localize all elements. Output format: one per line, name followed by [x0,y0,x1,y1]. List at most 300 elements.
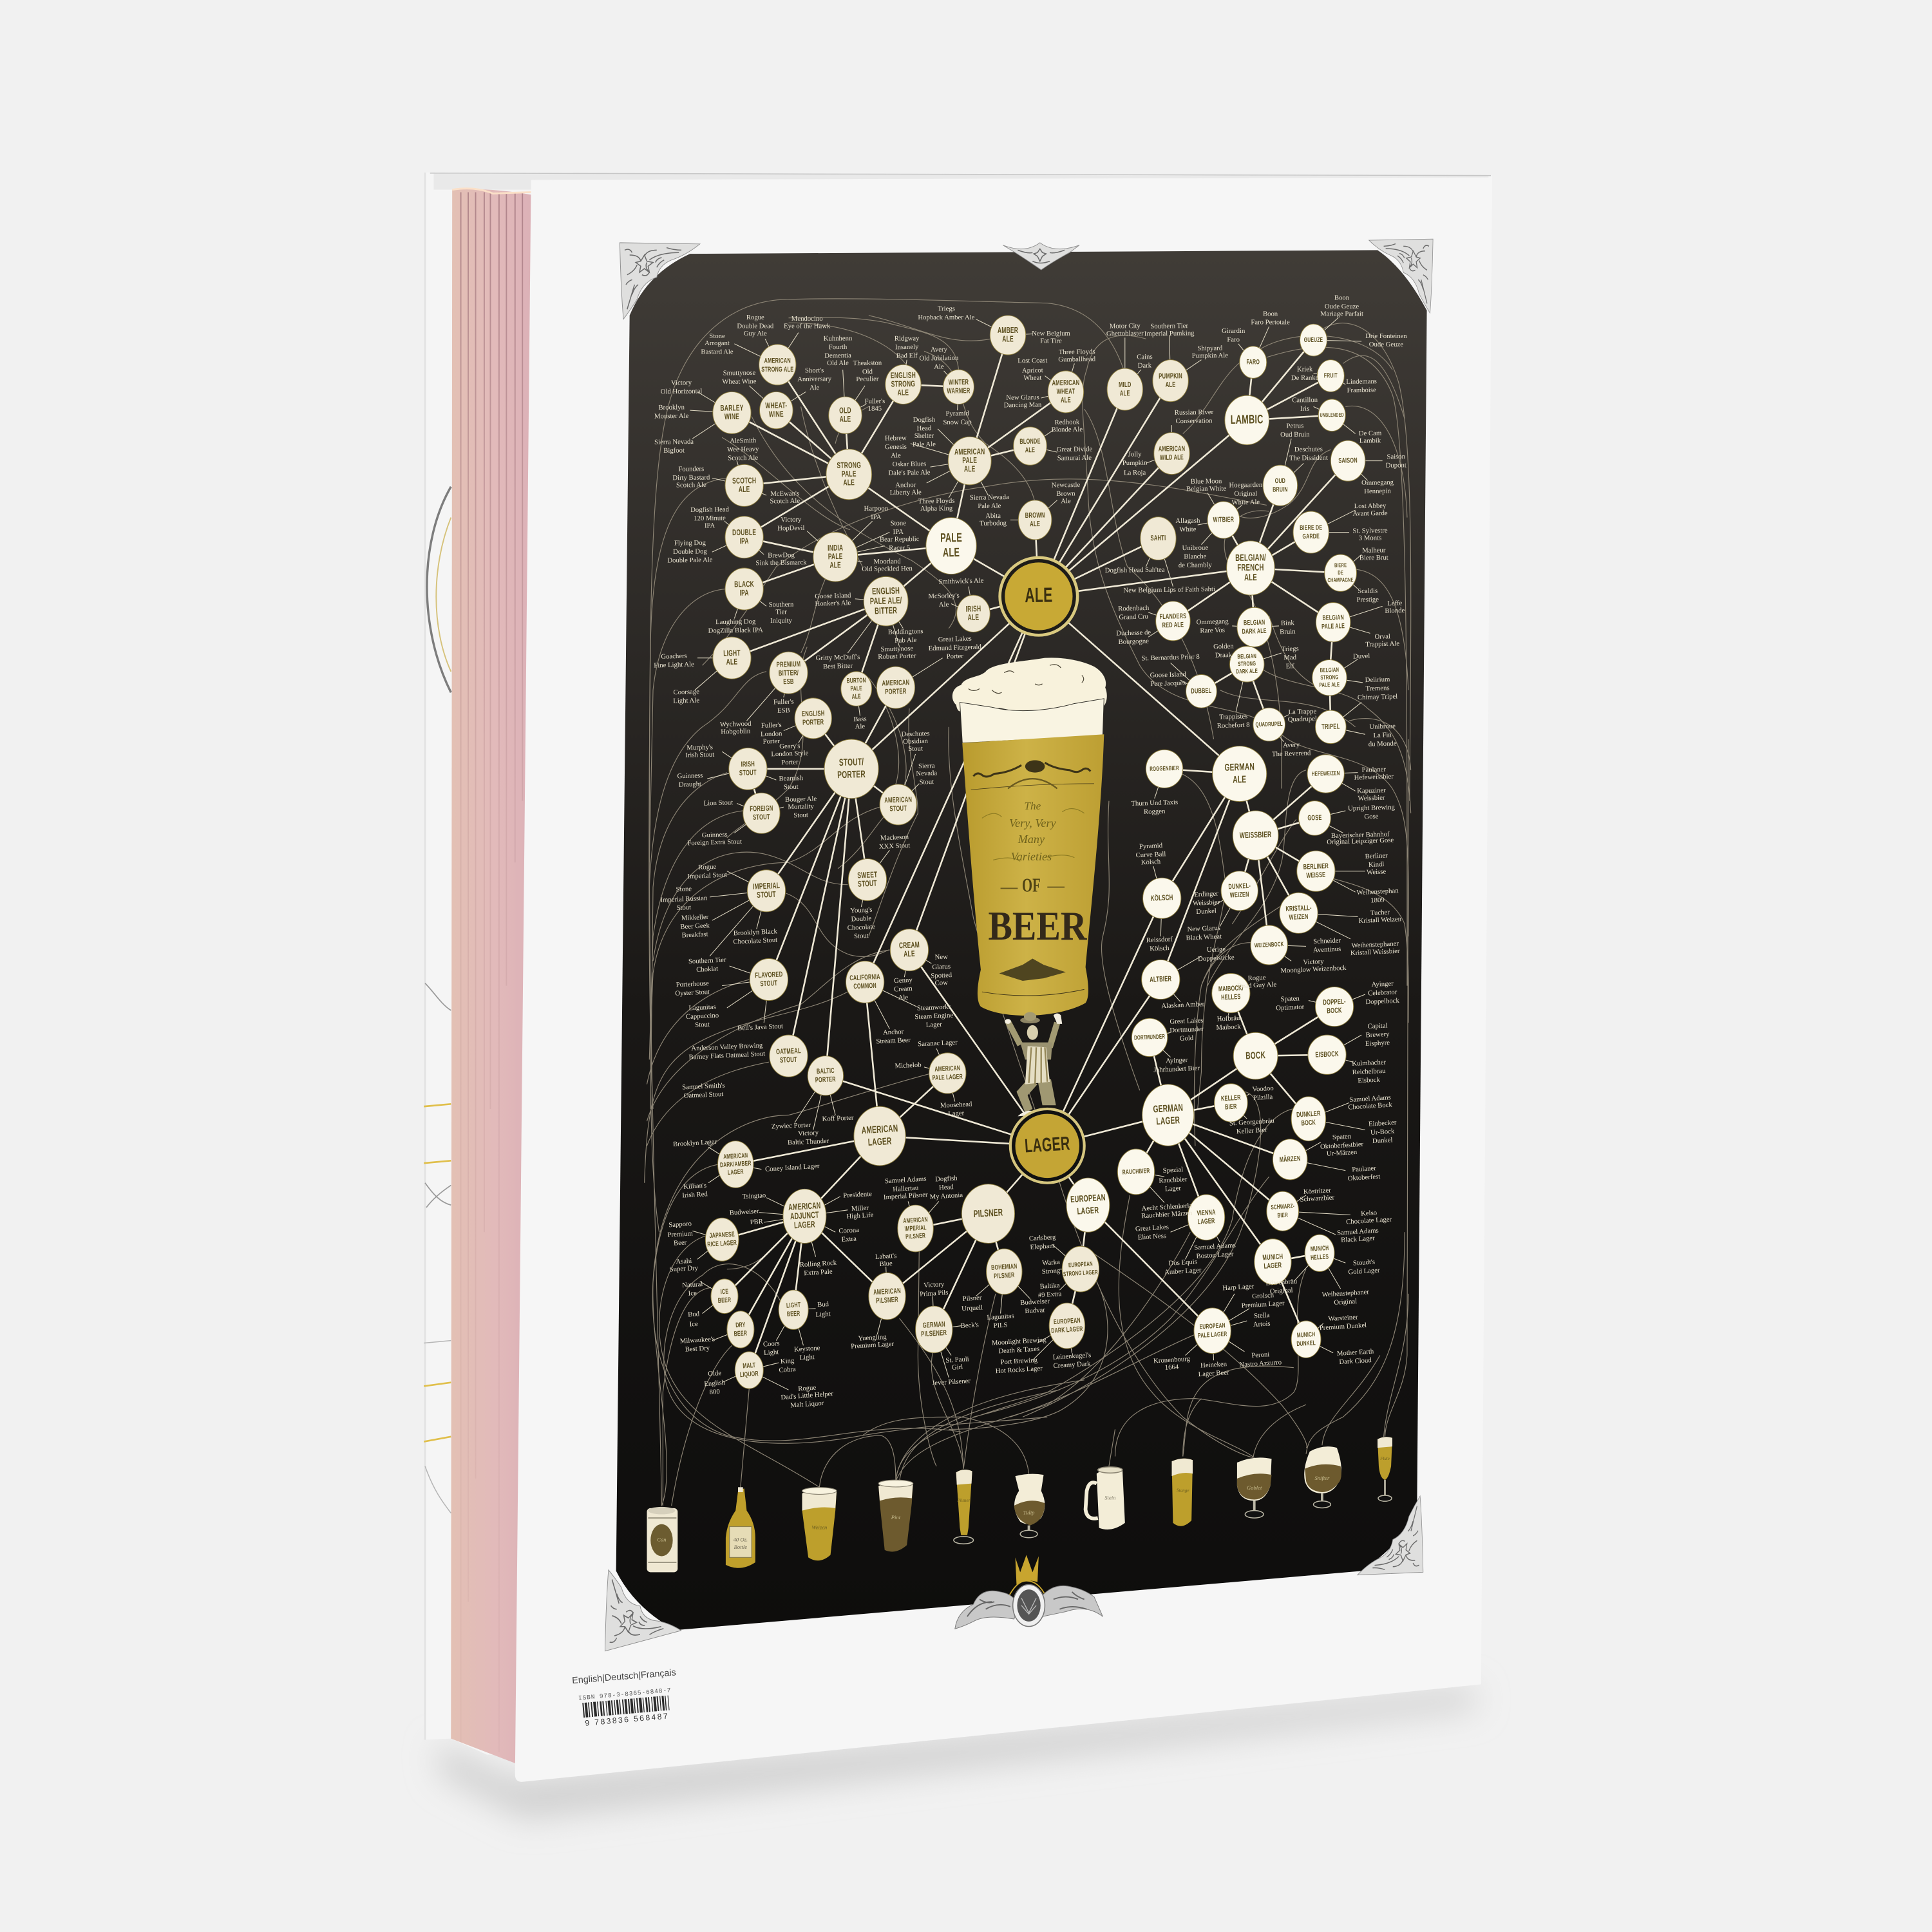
style: Dortmunder [1132,1016,1204,1074]
style: Hefeweizen [1307,755,1394,802]
style: India Pale Ale: Bear Republic [880,535,920,544]
style: Malt Liquor: LIQUOR [739,1370,759,1379]
glass: pilsner [954,1470,973,1544]
style: Cream Ale: Cream [894,985,913,993]
style: Scotch Ale: Founders [678,465,704,473]
style: Vienna Lager: Boston Lager [1196,1250,1234,1260]
style: European Dark Lager: Moonlight Brewing [992,1336,1047,1347]
style: Oatmeal Stout: OATMEAL [776,1047,801,1056]
style: Pale Ale: ALE [943,546,960,560]
style: Cream Ale: ALE [904,949,915,959]
style: Quadrupel: Quadrupel [1288,715,1317,723]
glass: can [647,1507,677,1572]
style: India Pale Ale: ALE [829,561,841,570]
style: Scotch Ale: Wee Heavy [727,445,759,453]
style: Dunkelweizen: Weissbier [1193,898,1220,907]
style: American Dark/Amber Lager: Irish Red [682,1190,708,1200]
style: Sweet Stout: XXX Stout [879,842,911,851]
glass: goblet: Goblet [1247,1484,1262,1491]
style: Flanders Red Ale: Grand Cru [1119,612,1149,621]
style: European Strong Lager: STRONG LAGER [1063,1269,1098,1278]
style: Witbier: Blanche [1184,553,1207,560]
style: Eisbock: Eisbock [1358,1076,1381,1084]
style: American Wheat Ale: Three Floyds [1059,348,1095,356]
style: Amber Ale: ALE [1002,335,1014,344]
style: Dortmunder: Jahrhundert Bier [1153,1065,1200,1074]
slipcase [424,173,1492,1756]
style: Dunkler Bock: Ur-Bock [1370,1128,1395,1137]
style: Baltic Porter: Koff Porter [822,1114,854,1123]
style: Bohemian Pilsner: Lagunitas [987,1312,1014,1321]
style: India Pale Ale: Racer 5 [889,544,910,552]
style: Malt Liquor: Olde [708,1369,722,1378]
style: English Pale Ale / Bitter: Robust Porter [878,652,916,661]
style: Keller Bier: Keller Bier [1236,1126,1268,1135]
poster panel [616,250,1427,1630]
style: Flanders Red Ale: Duchesse de [1116,629,1151,638]
style: American Strong Ale: Double Dead [737,322,774,330]
style: Black IPA: IPA [739,589,749,598]
style: European Strong Lager: Strong [1041,1267,1061,1276]
style: Dry Beer: DRY [735,1321,746,1329]
style: Ice Beer: Ice [689,1320,698,1329]
title: The Very, Very Many Varieties of Beer [988,800,1088,949]
style: Dortmunder: Great Lakes [1170,1016,1204,1026]
style: Saison: Saison [1387,453,1406,460]
style: Munich Dunkel [1291,1313,1374,1366]
glass: stange [1172,1459,1193,1526]
style: Schwarzbier: SCHWARZ- [1271,1202,1294,1211]
style: Scotch Ale: Scotch Ale [676,481,706,489]
style: Maibock / Helles: Maibock [1216,1023,1241,1032]
style: Bohemian Pilsner: Pilsner [962,1294,982,1303]
style: Belgian Pale Ale: Trappist Ale [1365,639,1400,649]
style: Flavored Stout: Stout [695,1021,710,1029]
style: Sahti: SAHTI [1150,535,1166,543]
style: Flavored Stout: Lagunitas [688,1003,716,1012]
style: Witbier: Original [1234,489,1257,498]
beer body [962,734,1104,1016]
style: Belgian / French Ale: ALE [1244,572,1257,583]
style: American Imperial Pilsner: Imperial Pilsner [884,1191,928,1201]
style: European Pale Lager: EUROPEAN [1199,1321,1226,1331]
glass: flute [1378,1437,1392,1501]
style: Flavored Stout [675,956,788,1032]
style: Winter Warmer: Old Jubilation [919,354,959,363]
style: Bohemian Pilsner: Budvar [1025,1306,1046,1315]
style: American Strong Ale [701,314,831,385]
style: Berliner Weisse: 1809 [1370,896,1385,905]
style: Schwarzbier: Samuel Adams [1337,1227,1379,1237]
style: Oud Bruin: Oud Bruin [1280,431,1310,439]
style: German Lager: LAGER [1156,1114,1180,1127]
style: Rauchbier: Rauchbier [1159,1175,1188,1185]
style: English Strong Ale: Bad Elf [896,352,918,360]
style: American Wild Ale: Jolly [1128,450,1142,459]
style: Oatmeal Stout: STOUT [780,1056,797,1065]
style: Vienna Lager: Samuel Adams [1194,1242,1236,1252]
style: Tripel: Chimay Tripel [1358,692,1397,701]
style: Unblended [1292,396,1382,445]
style: Belgian Strong Pale Ale: STRONG [1320,674,1339,681]
glass: flute: Flute [1379,1457,1390,1461]
style: California Common: COMMON [853,981,876,991]
style: European Strong Lager: #9 Extra [1037,1290,1062,1299]
style: Black IPA: Iniquity [770,616,793,625]
style: Oud Bruin: The Dissident [1289,454,1328,462]
style: Belgian Dark Ale [1197,607,1296,647]
style: Keller Bier [1215,1084,1275,1135]
style: Weizenbock: Schneider [1313,936,1341,945]
style: Rauchbier: Aecht Schlenkerla [1141,1202,1193,1213]
style: Tripel: La Fin [1373,731,1392,739]
style: Foreign Stout: Stout [793,811,808,819]
style: Saison: Hennepin [1364,488,1392,495]
style: Amber Ale: Triegs [938,305,955,313]
style: Gueuze: Oude Geuze [1325,303,1359,310]
style: Malt Liquor: Rogue [798,1384,817,1393]
style: Dunkelweizen: WEIZEN [1230,891,1249,900]
style: Berliner Weisse: Berliner [1365,851,1388,860]
style: Premium Bitter / ESB: ESB [777,706,790,715]
style: Sweet Stout: Stout [854,932,869,940]
style: Imperial Stout: STOUT [757,890,776,900]
style: Berliner Weisse [1297,851,1399,905]
style: American Stout [880,730,938,825]
style: English Porter: Porter [781,758,799,766]
style: Belgian Strong Dark Ale: Triegs [1282,645,1299,653]
style: Kristallweizen: Kristall Weizen [1358,915,1402,925]
style: Sweet Stout: Double [851,914,872,923]
style: American Dark/Amber Lager: LAGER [728,1168,744,1176]
style: Rauchbier: RAUCHBIER [1122,1167,1150,1176]
style: English Porter: Fuller's [761,721,782,730]
style: Sweet Stout: SWEET [857,870,878,880]
style: Bohemian Pilsner: BOHEMIAN [991,1262,1018,1271]
style: Munich Lager [1255,1239,1291,1285]
style: Black IPA [708,568,794,635]
style: German Ale [1213,746,1267,802]
style: Doppelbock: Spaten [1280,994,1300,1003]
style: Strong Pale Ale: STRONG [837,461,861,470]
style: Munich Helles: Stoudt's [1353,1258,1375,1267]
barcode [578,1687,674,1728]
style: American Pilsner: AMERICAN [873,1287,901,1297]
style: English Strong Ale: ENGLISH [891,371,916,381]
style: Scotch Ale: ALE [739,485,750,495]
style: Sahti: New Belgium Lips of Faith Sahti [1123,585,1215,594]
style: Dry Beer [679,1311,754,1354]
style: Burton Pale Ale [841,672,872,731]
style: Dortmunder: Ayinger [1166,1056,1188,1065]
style: Biere de Garde: Avant Garde [1352,509,1388,518]
style: Munich Lager: LAGER [1264,1262,1282,1271]
style: Biere de Champagne: Biere Brut [1359,554,1388,562]
style: American Wheat Ale: WHEAT [1057,388,1075,396]
style: India Pale Ale: Moorland [873,558,901,565]
style: India Pale Ale: Harpoon [864,504,889,513]
style: Fruit: Kriek [1297,365,1313,374]
style: Dortmunder: DORTMUNDER [1134,1033,1165,1041]
style: Faro [1222,310,1290,378]
style: Scotch Ale: AleSmith [730,437,757,445]
style: Baltic Porter: BALTIC [817,1066,835,1076]
style: European Pale Lager: Harp Lager [1222,1282,1255,1292]
slipcase see-through artwork [424,487,451,1513]
style: Double IPA: Double Pale Ale [667,556,713,564]
style: Sweet Stout [847,833,911,940]
style: Double IPA: IPA [739,537,749,546]
style: American Dark/Amber Lager [673,1138,820,1200]
style: English Pale Ale / Bitter: Smuttynose [880,645,914,653]
style: Flavored Stout: Bell's Java Stout [737,1023,783,1032]
style: American Stout: STOUT [889,804,907,813]
style: American Wheat Ale: AMERICAN [1052,379,1079,388]
style: Witbier: Hoegaarden [1229,481,1263,489]
style: Kristallweizen: Kristall Weissbier [1350,947,1400,957]
style: Belgian Strong Dark Ale: DARK ALE [1236,668,1258,675]
style: Saison: Ommegang [1361,478,1394,487]
style: Biere de Garde: 3 Monts [1359,534,1381,542]
style: Black IPA: BLACK [734,580,754,589]
style: Old Ale [824,334,885,433]
style: Biere de Champagne: Malheur [1362,546,1386,554]
style: Brown Ale: Abita [985,512,1001,520]
style: Old Ale: Theakston [853,359,882,367]
style: American Pilsner: Labatt's [875,1252,897,1261]
style: Quadrupel: The Reverend [1272,749,1311,758]
style: Japanese Rice Lager: Beer [674,1238,687,1247]
glass: goblet [1237,1457,1271,1518]
style: Pale Ale [926,518,976,574]
style: Imperial Stout: Rogue [698,863,717,871]
style: India Pale Ale: IPA [871,513,882,521]
style: American Adjunct Lager: ADJUNCT [790,1210,819,1222]
style: American Porter: PORTER [885,687,907,696]
style: American Strong Ale: Arrogant [705,339,730,347]
style: American Wheat Ale [1004,348,1096,413]
style: English Pale Ale / Bitter: Gritty McDuff's [816,653,860,662]
bartender holding the glass [1005,1012,1062,1116]
ornament: bottom-left corner [605,1551,681,1651]
style: Amber Ale [918,305,1071,355]
style: Munich Lager: MUNICH [1262,1253,1283,1262]
style: Mild Ale: MILD [1119,381,1132,390]
style: Dry Beer: Milwaukee's [679,1335,715,1345]
style: Irish Ale: ALE [967,613,979,623]
style: Biere de Garde: St. Sylvestre [1352,527,1388,535]
style: German Pilsner: PILSENER [921,1329,947,1339]
style: Pumpkin Ale: Imperial Pumking [1144,329,1195,337]
style: Oatmeal Stout: Oatmeal Stout [683,1090,724,1100]
style: Premium Bitter / ESB: Hobgoblin [721,727,751,736]
style: Strong Pale Ale [826,449,872,500]
style: American Stout: Stout [908,744,923,753]
style: Belgian Strong Pale Ale: BELGIAN [1320,667,1339,674]
style: Burton Pale Ale: Bass [853,715,867,723]
style: Wheat-Wine: Anniversary [797,375,832,383]
style: Imperial Stout [660,863,786,956]
style: German Lager [1142,1084,1194,1146]
style: California Common: Stream Beer [876,1036,911,1045]
style: Old Ale: Peculier [856,375,879,383]
style: Wheat-Wine: Ale [810,384,820,392]
glass: tulip: Tulip [1023,1509,1035,1515]
style: Märzen: Oktoberfest [1347,1173,1381,1182]
style: Brown Ale: ALE [1030,520,1040,529]
style: Pumpkin Ale [1144,322,1228,402]
style: Oud Bruin: Petrus [1286,422,1303,430]
style: Biere de Garde: BIERE DE [1300,524,1322,531]
style: Doppelbock [1276,980,1400,1027]
style: Belgian Pale Ale: Orval [1374,632,1390,641]
style: Scotch Ale: Scotch Ale [770,497,800,505]
style: Kristallweizen [1280,893,1402,957]
style: Premium Bitter / ESB: Wychwood [720,720,752,728]
style: California Common: Lager [926,1021,942,1029]
style: Bohemian Pilsner: PILSNER [994,1271,1015,1280]
style: Japanese Rice Lager: Asahi [676,1257,692,1265]
style: Belgian Dark Ale: Bruin [1280,628,1296,636]
style: American Stout: Nevada [916,769,938,777]
style: Pumpkin Ale: Southern Tier [1150,322,1188,330]
style: American Wheat Ale: Gumballhead [1058,355,1096,364]
style: American Pilsner: Blue [879,1260,893,1268]
style: American Pilsner: Premium Lager [851,1340,895,1350]
style: Flanders Red Ale: Bourgogne [1118,638,1149,646]
style: Belgian Dark Ale: Ommegang [1197,618,1229,626]
back cover [515,178,1492,1782]
style: Eisbock: Eisphyre [1365,1039,1390,1048]
style: Strong Pale Ale: PALE [842,469,857,479]
style: Japanese Rice Lager: Premium [667,1229,694,1239]
style: Barley Wine: Victory [671,379,692,387]
style: American Strong Ale: STRONG ALE [761,365,793,374]
style: California Common [846,961,954,1045]
style: Hefeweizen: Kapuziner [1357,786,1386,795]
style: Brown Ale [980,481,1081,540]
style: English Porter: PORTER [802,718,824,727]
style: Dunkler Bock: Chocolate Bock [1348,1101,1393,1112]
style: Flavored Stout: Choklat [696,965,718,974]
style: Faro: Faro [1227,336,1240,344]
style: Old Ale: OLD [839,406,851,415]
style: Bohemian Pilsner [961,1249,1050,1330]
style: Schwarzbier: Chocolate Lager [1346,1215,1392,1226]
style: Barley Wine: Bigfoot [663,446,685,455]
style: India Pale Ale [755,504,920,582]
style: California Common: Steamworks [917,1003,951,1012]
style: Doppelbock: BOCK [1327,1007,1342,1016]
style: Schwarzbier: BIER [1277,1211,1288,1219]
style: American Pale Ale [885,416,1009,513]
style: Scotch Ale: Dirty Bastard [672,473,710,482]
style: English Pale Ale / Bitter: Best Bitter [823,662,853,670]
style: Unblended: UNBLENDED [1320,412,1344,419]
style: German Pilsner: Jever Pilsener [932,1377,971,1387]
style: Irish Stout [677,743,804,791]
style: Pumpkin Ale: Shipyard [1197,345,1223,352]
style: Unblended: Lambik [1359,437,1381,445]
style: Blonde Ale: Samurai Ale [1057,454,1092,462]
style: Imperial Stout: Beer Geek [680,922,710,931]
style: American Pale Lager: PALE LAGER [932,1073,963,1081]
style: Biere de Garde: Lost Abbey [1354,502,1387,510]
style: Saison [1331,440,1406,495]
style: German Pilsner: Prima Pils [920,1289,949,1298]
style: Mild Ale: Ghettoblaster [1106,330,1144,337]
style: Vienna Lager: VIENNA [1197,1208,1216,1218]
style: Munich Dunkel: Dark Cloud [1339,1356,1372,1366]
style: American Pale Ale: Head [917,424,932,432]
ornament: bottom-right corner [1358,1496,1423,1577]
style: Wheat-Wine: Smuttynose [723,369,756,377]
style: Belgian / French Ale: BELGIAN/ [1235,552,1266,564]
style: Brown Ale: Brown [1056,489,1075,498]
style: Mild Ale [1106,322,1153,410]
style: European Lager: EUROPEAN [1070,1192,1106,1205]
style: Dry Beer: BEER [734,1329,748,1338]
style: Oud Bruin: OUD [1275,477,1285,485]
style: Dortmunder: Dortmunder [1170,1025,1204,1034]
style: European Pale Lager: Artois [1253,1320,1271,1329]
style: Pilsner: PILSNER [973,1206,1003,1220]
style: Light Beer: Light [815,1310,831,1319]
style: Irish Ale [928,576,990,632]
style: Japanese Rice Lager: Super Dry [669,1264,699,1273]
style: American Pale Ale: Three Floyds [918,497,955,506]
style: American Wheat Ale: ALE [1061,396,1071,405]
style: Fruit: Lindemans [1346,377,1377,386]
style: Witbier: de Chambly [1179,561,1213,569]
style: European Pale Lager: Premium Lager [1241,1300,1285,1310]
style: Double IPA: 120 Minute [694,515,726,522]
style: German Pilsner: Beck's [960,1321,979,1330]
style: German Ale: ALE [1233,773,1247,785]
style: Rauchbier: Spezial [1162,1166,1184,1175]
style: Ice Beer [682,1279,738,1329]
style: Berliner Weisse: Weisse [1367,867,1387,876]
style: Tripel [1315,692,1397,748]
style: American Pale Lager: Saranac Lager [918,1039,958,1048]
style: Kölsch: Pyramid [1139,842,1163,851]
foam shading marks [969,665,1084,694]
style: Cream Ale [890,929,952,1002]
style: Strong Pale Ale: ALE [843,478,855,488]
style: Irish Stout: STOUT [739,769,757,778]
style: Belgian Dark Ale: Bink [1281,619,1295,627]
style: Fruit: Framboise [1347,386,1376,394]
style: Foreign Stout: Mortality [788,802,815,811]
glass foam [952,658,1107,713]
style: Oatmeal Stout: Barney Flats Oatmeal Stout [688,1050,765,1061]
style: Schwarzbier: Kelso [1361,1209,1377,1218]
style: Dubbel: Goose Island [1150,670,1187,679]
style: Vienna Lager: Eliot Ness [1137,1232,1166,1242]
style: Faro: Girardin [1222,327,1245,335]
style: Imperial Stout: IMPERIAL [753,881,781,891]
style: American Imperial Pilsner: My Antonia [929,1191,963,1201]
style: Double IPA: Double Dog [673,547,707,556]
style: Munich Helles: Original [1270,1286,1293,1296]
style: American Wheat Ale: Lost Coast [1018,357,1047,365]
style: Light Ale [654,637,751,705]
style: Lambic: LAMBIC [1231,413,1264,427]
style: American Wheat Ale: Wheat [1023,374,1041,382]
style: European Pale Lager: 1664 [1164,1363,1179,1372]
style: German Pilsner: Girl [952,1363,963,1372]
style: Cream Ale: Cow [934,979,948,987]
